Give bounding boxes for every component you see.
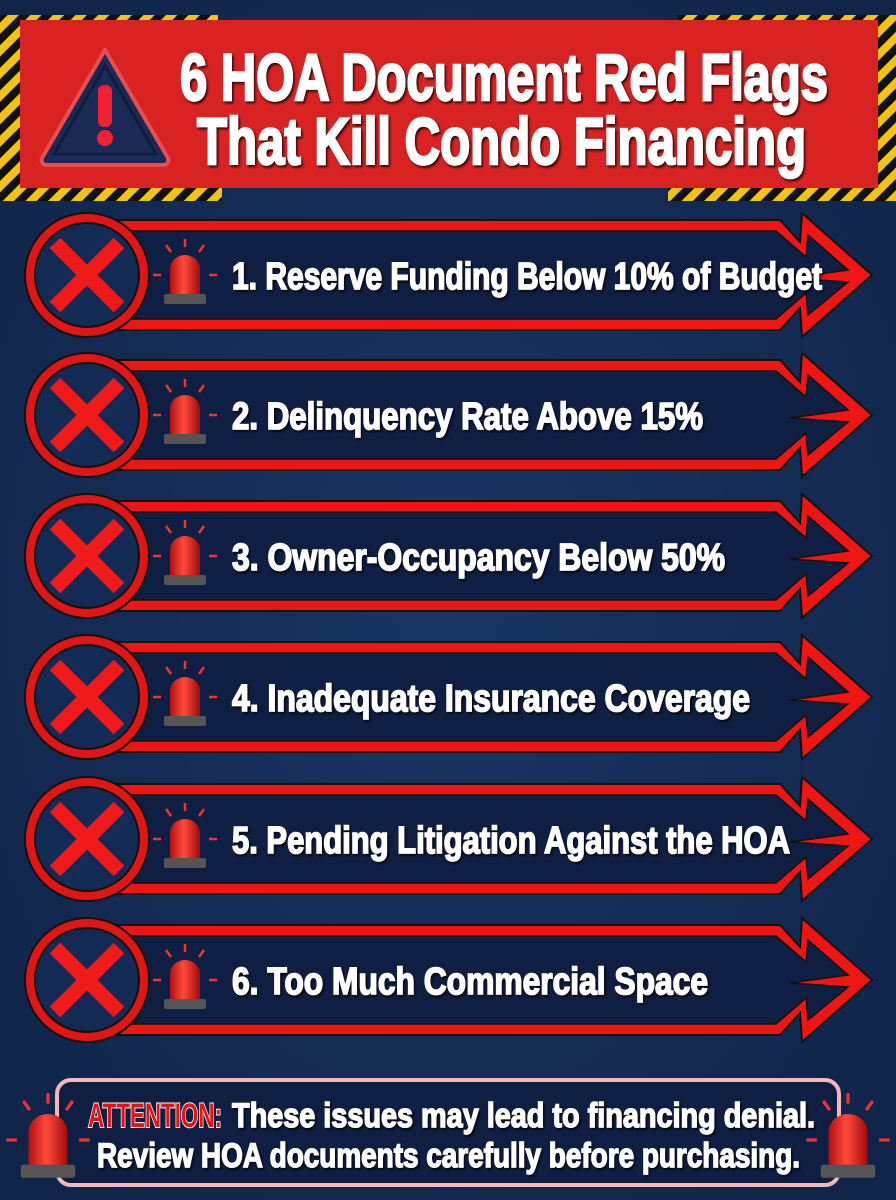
icon: warning triangle bbox=[42, 50, 168, 165]
footer callout bbox=[6, 1080, 890, 1185]
icon: left siren bbox=[6, 1093, 90, 1178]
row 6: 6. Too Much Commercial Space bbox=[232, 961, 708, 1003]
row 3: 3. Owner-Occupancy Below 50% bbox=[232, 537, 725, 579]
header banner bbox=[0, 15, 896, 201]
row 5 bbox=[25, 777, 872, 901]
row 2: 2. Delinquency Rate Above 15% bbox=[232, 396, 703, 438]
icon: right siren bbox=[806, 1093, 890, 1178]
row 2 bbox=[25, 353, 872, 477]
row 4: 4. Inadequate Insurance Coverage bbox=[232, 678, 750, 720]
title bbox=[180, 40, 828, 178]
row 1 bbox=[25, 213, 872, 337]
row 4 bbox=[25, 635, 872, 759]
row 6 bbox=[25, 918, 872, 1042]
footer callout: ATTENTION: bbox=[88, 1097, 222, 1135]
row 3 bbox=[25, 494, 872, 618]
